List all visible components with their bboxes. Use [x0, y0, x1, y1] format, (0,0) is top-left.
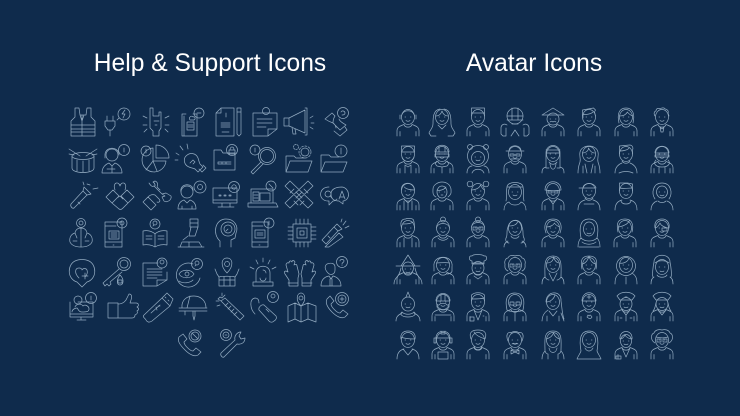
icon: phone with blocked sign — [178, 330, 201, 356]
avatar: man with short hair — [615, 183, 637, 210]
avatar: police officer man — [615, 292, 637, 321]
icon: info pie chart — [141, 145, 169, 172]
icon: locked folder — [214, 144, 238, 170]
icon: laptop with bubble — [248, 181, 278, 207]
avatar: woman with beanie and long hair — [542, 146, 564, 173]
icon: flashlight — [71, 182, 98, 208]
avatar: person with glasses and side hair — [651, 219, 673, 247]
avatar: chef with hat — [467, 254, 489, 284]
icon: drum — [69, 149, 97, 172]
icon: worker with pin — [215, 258, 239, 286]
avatar: person with glasses and cap — [542, 182, 564, 210]
avatar: doctor in suit — [467, 293, 489, 321]
icon: clipboard with cloud — [182, 108, 204, 136]
icon: phone with 24 bubble — [326, 292, 348, 318]
icon: document with search — [143, 258, 167, 286]
avatar: woman with bob hair — [615, 108, 637, 136]
avatar: woman with long hair — [429, 109, 455, 136]
icon: computer mouse with search — [251, 292, 278, 322]
avatar: football player helmet — [501, 108, 529, 136]
avatar: worker with ear muffs — [432, 331, 454, 359]
icon: info magnifier — [250, 145, 276, 174]
icon: folder with gears — [286, 144, 312, 172]
title: Avatar Icons: Avatar Icons — [466, 50, 602, 77]
avatar: nurse with cross cap — [578, 293, 600, 321]
avatar: man with cap and beard — [397, 146, 419, 173]
avatar: woman with headband and long hair — [651, 255, 673, 284]
avatar: woman in hijab — [578, 219, 600, 247]
icon: microchip — [288, 219, 316, 247]
avatar: man with conical hat and moustache — [542, 108, 564, 136]
icon: megaphone — [284, 108, 314, 135]
avatar: witch with pointed hat — [394, 255, 422, 284]
icon: head with target — [215, 219, 237, 247]
avatar: boy in flat cap — [578, 184, 600, 210]
avatar: woman with headband — [504, 182, 526, 210]
avatar: man with afro and glasses — [651, 330, 673, 359]
icon: eye in circle with search — [176, 258, 202, 287]
icon: brain with gear — [70, 218, 92, 247]
icon: safety vest — [71, 108, 95, 136]
avatar: woman with centre parted hair — [578, 256, 600, 284]
icon: flashlight with beams — [216, 293, 244, 320]
avatar: woman with short bob — [542, 219, 564, 247]
avatar: woman with long hair — [542, 331, 564, 359]
icon: siren alarm — [250, 258, 276, 286]
avatar: old man with moustache and bow tie — [504, 332, 526, 359]
avatar: woman with curly short hair — [431, 182, 453, 210]
icon: microscope — [178, 219, 204, 247]
avatar: woman with wavy hair — [578, 146, 600, 173]
avatar: businesswoman in blazer — [615, 332, 637, 359]
avatar: person in hood with glasses — [504, 293, 526, 321]
icon: open book with search — [143, 219, 167, 247]
icon: crossed flashlights — [322, 219, 349, 247]
avatar: worker in helmet and goggles — [431, 145, 453, 173]
icon: hard hat — [179, 296, 207, 320]
avatar: woman with veil — [577, 331, 601, 359]
avatar: woman with headset mic — [432, 257, 454, 284]
avatar: man with quiff — [578, 108, 600, 136]
avatar: older woman with glasses and bun — [467, 217, 489, 247]
icon: agent with gear bubble — [178, 181, 206, 209]
icon: folder with info — [321, 145, 347, 172]
icon: plug with bolt — [105, 108, 130, 136]
avatar: woman with side fringe — [614, 219, 636, 247]
avatar: woman with rounded hair — [651, 183, 673, 210]
avatar: construction worker — [432, 294, 454, 321]
icon: handshake in diamond — [106, 183, 134, 209]
avatar: police officer woman — [651, 292, 673, 321]
icon: crossed tools — [285, 181, 313, 208]
icon: pair of gloves — [284, 260, 316, 286]
avatar: punk boy with scarf — [396, 292, 420, 321]
avatar: woman with side swept long hair — [542, 293, 564, 321]
panel: help and support icon grid — [69, 108, 349, 357]
avatar: man with side parting in shirt — [397, 183, 419, 210]
icon: hourglass with bubble — [325, 108, 348, 136]
icon: sticky note with pin — [253, 108, 277, 136]
title: Help & Support Icons: Help & Support Icons — [94, 50, 326, 77]
icon: key with lock drop — [103, 258, 130, 286]
icon: heart location pin — [69, 260, 95, 287]
avatar: boy with curly hair and tie — [651, 108, 673, 136]
avatar: man with hat and glasses — [504, 146, 526, 173]
icon: light bulb idea — [175, 144, 206, 172]
icon: phone with info — [252, 218, 274, 247]
avatar: girl with hair buns — [467, 181, 489, 210]
avatar: woman with curly hair and glasses — [504, 255, 526, 284]
icon: document and pen — [216, 108, 241, 136]
icon: monitor with gear — [213, 182, 240, 207]
avatar: worker with helmet and goggles scarf — [651, 146, 673, 173]
icon: support agent with info — [102, 144, 130, 173]
icon: map with search pin — [288, 293, 316, 322]
icon: monitor with person and info — [70, 292, 96, 320]
avatar: man with swept hair — [615, 145, 637, 173]
icon: foam hand number one — [143, 108, 169, 136]
avatar: woman with long straight hair — [542, 256, 564, 284]
avatar: boy with curly hair and V neck — [397, 331, 419, 359]
icon: Q and A speech bubbles — [321, 187, 349, 205]
icon: thumbs up — [108, 294, 138, 318]
avatar: bear hood child — [467, 144, 489, 173]
avatar: man with quiff and jacket — [397, 218, 419, 247]
panel: avatar icon grid — [394, 108, 673, 359]
avatar: woman with headset — [397, 110, 419, 136]
avatar: man with turban — [467, 330, 489, 359]
icon: USB stick — [143, 293, 173, 322]
avatar: man with round hood — [615, 256, 637, 284]
icon: phone with bubble — [105, 218, 127, 247]
icon: man with question bubble — [321, 256, 348, 286]
avatar: man with flat top hair — [467, 108, 489, 136]
avatar: woman with wavy long hair — [504, 220, 526, 247]
icon: hand with wrench — [143, 181, 171, 210]
icon: wrench with 24 bubble — [220, 330, 245, 357]
avatar: woman with hair bun and backpack — [432, 217, 454, 247]
